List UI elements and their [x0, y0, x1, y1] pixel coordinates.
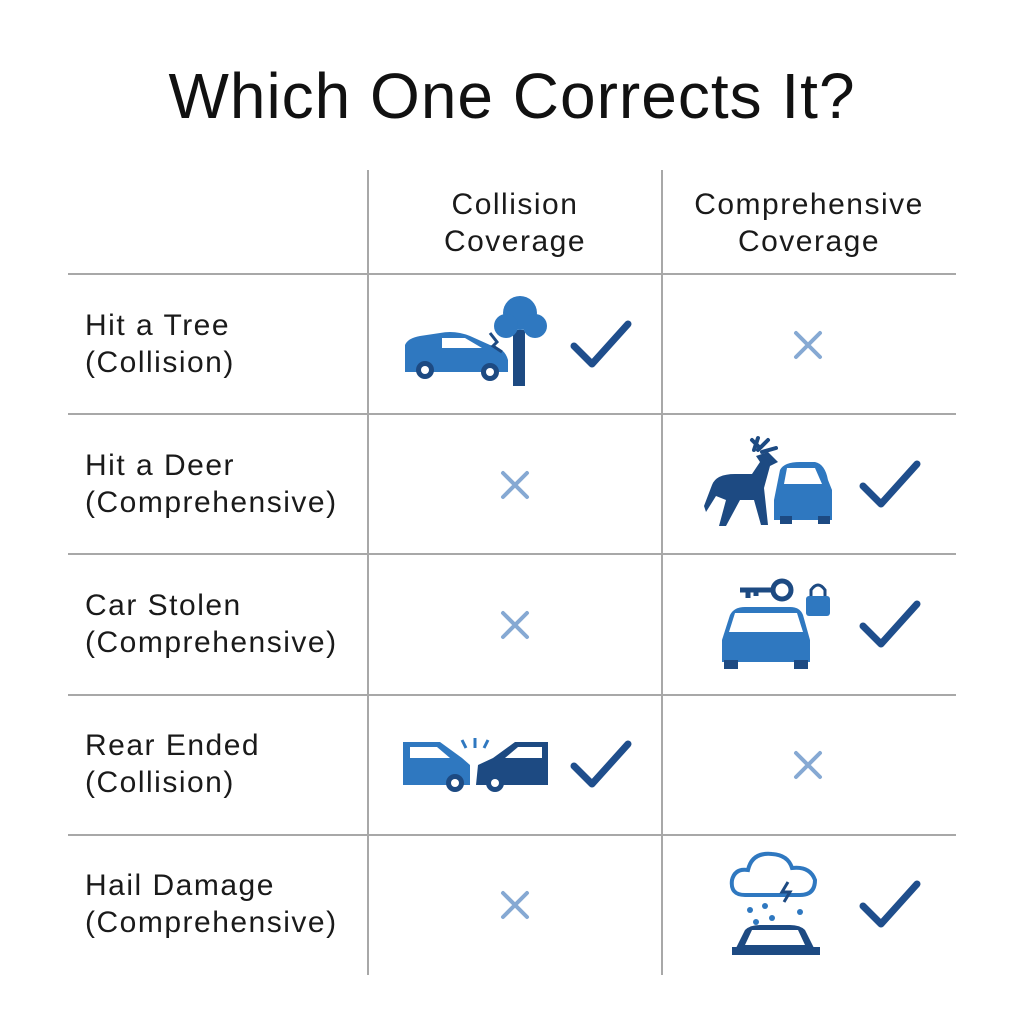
check: hail [863, 884, 917, 924]
check: deer [863, 464, 917, 504]
icon: rear ended cars [403, 738, 548, 792]
icon: hail on car [732, 854, 820, 955]
row label: tree: (Collision) [85, 346, 235, 379]
icon: car hits tree [405, 296, 547, 386]
row label: rear ended: (Collision) [85, 766, 235, 799]
row label: hail: (Comprehensive) [85, 906, 338, 939]
title: Which One Corrects It? [168, 60, 856, 132]
header: comprehensive: Comprehensive [694, 188, 924, 221]
row label: hail [85, 869, 338, 939]
icon: deer and car [704, 438, 832, 526]
check: stolen [863, 604, 917, 644]
row label: stolen [85, 589, 338, 659]
x: hail collision [503, 893, 527, 917]
row label: deer: (Comprehensive) [85, 486, 338, 519]
x: deer collision [503, 473, 527, 497]
row label: hail: Hail Damage [85, 869, 275, 902]
x: rear comprehensive [796, 753, 820, 777]
row label: rear ended [85, 729, 260, 799]
check: rear ended [574, 744, 628, 784]
row label: deer [85, 449, 338, 519]
header: collision: Collision [452, 188, 578, 221]
row label: tree: Hit a Tree [85, 309, 230, 342]
row label: tree [85, 309, 235, 379]
icon: stolen car with key and lock [722, 581, 830, 669]
row label: deer: Hit a Deer [85, 449, 235, 482]
row label: stolen: (Comprehensive) [85, 626, 338, 659]
header: collision [444, 188, 586, 258]
x: stolen collision [503, 613, 527, 637]
check: tree [574, 324, 628, 364]
header: collision: Coverage [444, 225, 586, 258]
x: tree comprehensive [796, 333, 820, 357]
row label: rear ended: Rear Ended [85, 729, 260, 762]
row label: stolen: Car Stolen [85, 589, 242, 622]
header: comprehensive: Coverage [738, 225, 880, 258]
header: comprehensive [694, 188, 924, 258]
